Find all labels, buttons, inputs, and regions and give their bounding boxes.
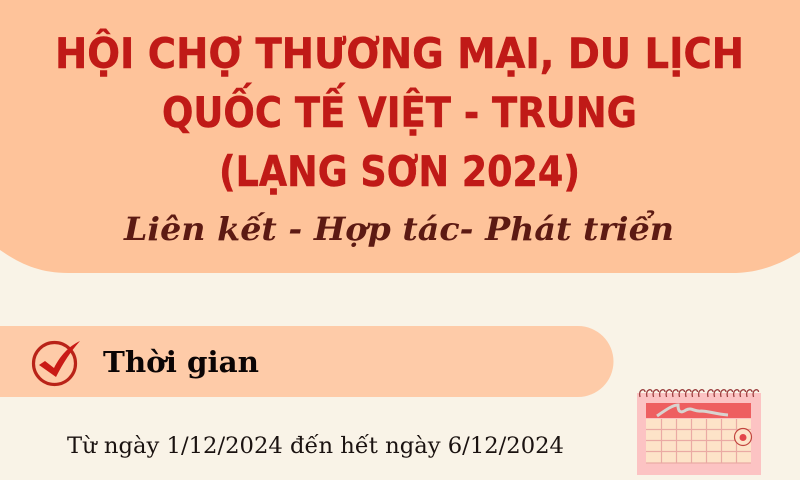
subtitle: Liên kết - Hợp tác- Phát triển [123,209,674,248]
text: event dates: Từ ngày 1/12/2024 đến hết ngày 6/12/2024 [67,433,564,459]
icon: calendar [637,390,761,475]
title [55,28,744,196]
panel: time heading bar [0,326,614,397]
panel: header [0,0,800,273]
icon: check mark [34,341,80,384]
title: HỘI CHỢ THƯƠNG MẠI, DU LỊCH [55,28,744,78]
title: QUỐC TẾ VIỆT - TRUNG [162,81,637,137]
heading: time: Thời gian [103,345,259,379]
title: (LẠNG SƠN 2024) [219,147,580,196]
